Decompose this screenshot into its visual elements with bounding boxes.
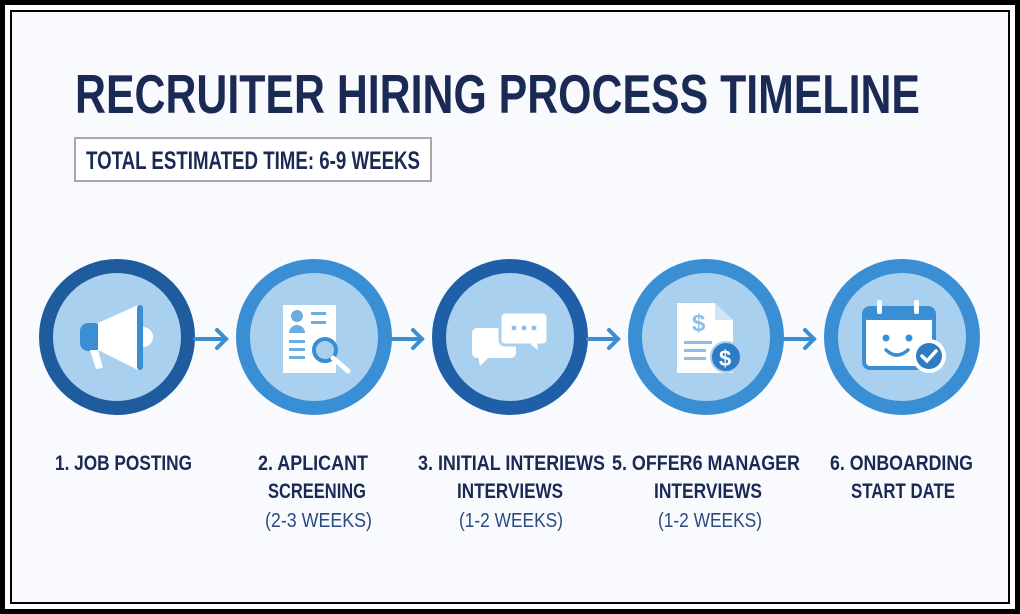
label 3: (1-2 WEEKS) <box>459 510 563 532</box>
label 5: START DATE <box>851 480 955 503</box>
total time box: TOTAL ESTIMATED TIME: 6-9 WEEKS <box>86 147 420 175</box>
label 5: 6. ONBOARDING <box>830 452 973 475</box>
total time box <box>75 138 431 181</box>
label 3: INTERVIEWS <box>457 480 563 503</box>
icon: offer document with dollar: $ <box>692 310 706 337</box>
icon: chat bubbles <box>472 312 548 366</box>
label 5 <box>830 452 973 503</box>
step 5 circle: onboarding <box>831 266 973 408</box>
arrow 2 <box>392 330 422 348</box>
label 3: 3. INITIAL INTERIEWS <box>418 452 605 475</box>
arrow 1 <box>195 330 226 348</box>
label 2: SCREENING <box>268 480 366 503</box>
label 4: (1-2 WEEKS) <box>658 510 762 532</box>
label 3 <box>418 452 605 532</box>
arrow 4 <box>784 330 814 348</box>
label 1: 1. JOB POSTING <box>55 452 192 475</box>
label 2: 2. APLICANT <box>258 452 368 475</box>
arrow 3 <box>588 330 618 348</box>
icon: calendar with check <box>864 300 946 373</box>
step 1 circle: job posting <box>46 266 188 408</box>
label 4: 5. OFFER6 MANAGER <box>612 452 800 475</box>
icon: offer document with dollar <box>677 303 741 373</box>
step 4 circle: offer <box>635 266 777 408</box>
label 2: (2-3 WEEKS) <box>265 510 372 532</box>
step 2 circle: screening <box>243 266 385 408</box>
icon: megaphone <box>80 305 153 370</box>
label 4 <box>612 452 800 532</box>
icon: offer document with dollar: $ <box>719 346 731 371</box>
label 2 <box>258 452 372 532</box>
label 4: INTERVIEWS <box>654 480 762 503</box>
icon: resume search <box>283 305 348 373</box>
step 3 circle: interviews <box>439 266 581 408</box>
